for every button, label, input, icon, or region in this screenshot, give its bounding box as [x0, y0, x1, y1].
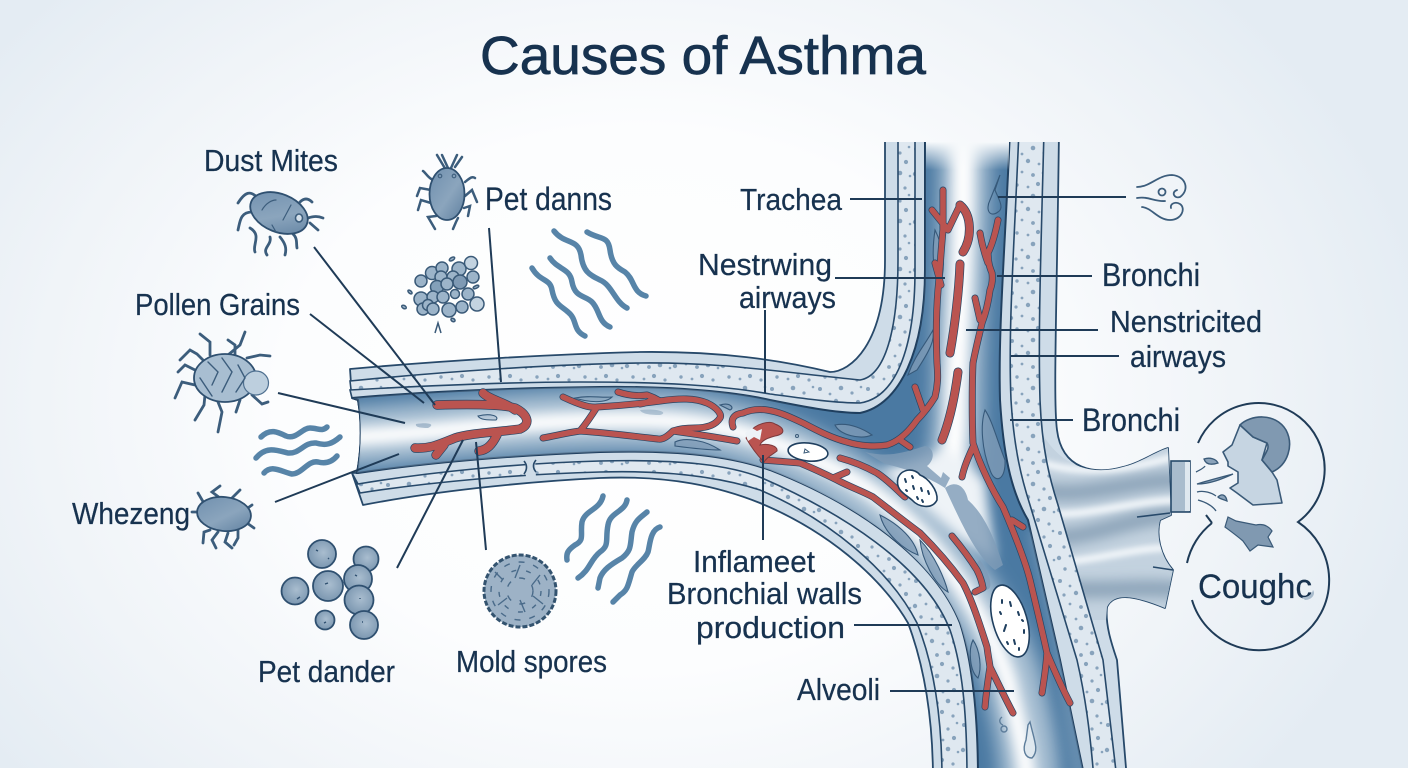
icon: pet dander spheres [282, 540, 378, 639]
hair [1240, 417, 1290, 472]
callout outline [1187, 403, 1329, 650]
head profile [1223, 425, 1282, 505]
label: Inflamed bronchial walls [667, 544, 862, 645]
icon: wavy air flow left [256, 427, 340, 474]
break in lower wall band [524, 458, 536, 478]
label: Nestrwing airways [698, 247, 836, 315]
airway outer wall with side branch [350, 130, 1173, 768]
icon: wavy lines lower [567, 496, 660, 602]
top fade of trachea [926, 142, 1009, 170]
label: Bronchi lower: Bronchi [1082, 402, 1180, 438]
bronchial blood vessels [415, 190, 1070, 713]
icon: mite near Whezeng [192, 486, 254, 548]
label: Nestrwing airways: airways [739, 280, 836, 315]
cough spray [1196, 458, 1233, 511]
label: Pollen Grains: Pollen Grains [135, 287, 300, 322]
label: Pet danns: Pet danns [485, 181, 612, 217]
cough callout [1187, 403, 1329, 650]
speckle texture [350, 130, 1117, 768]
label: Inflamed bronchial walls: Bronchial walls [667, 576, 862, 611]
label: Trachea: Trachea [740, 182, 843, 217]
icon: mite near Pet danns [417, 155, 477, 229]
icon: dust mite [238, 184, 323, 255]
c smudge [1302, 590, 1314, 600]
label: Nenstricited airways: airways [1130, 339, 1226, 374]
icon: pollen mite [175, 332, 270, 432]
label: Inflamed bronchial walls: Inflameet [693, 544, 815, 579]
lung fragment [1225, 517, 1273, 551]
title: Causes of Asthma [480, 26, 927, 86]
leader lines [275, 197, 1126, 691]
lumen shading [340, 120, 1082, 768]
label: Nenstricited airways: Nenstricited [1110, 304, 1262, 339]
cough label: Coughc [1198, 568, 1312, 606]
side branch shading [1044, 437, 1173, 620]
label: Bronchi upper: Bronchi [1102, 257, 1200, 293]
white mucus plug: large [990, 584, 1030, 658]
alveoli droplets [1000, 717, 1036, 758]
label: Nestrwing airways: Nestrwing [698, 247, 832, 282]
mucus patches [416, 175, 1005, 678]
airway lumen [352, 130, 1085, 768]
label: Nenstricited airways [1110, 304, 1262, 374]
label: Pet dander: Pet dander [258, 654, 395, 689]
icon: breath wisp [1137, 175, 1186, 220]
inflamed wall lesion [746, 422, 783, 462]
icon: wavy lines upper [532, 231, 646, 336]
branch nozzle and lips [1137, 461, 1190, 570]
icon: mold spore ball [484, 555, 556, 627]
inner pale wall layer [350, 130, 1094, 768]
airway anatomy [340, 120, 1180, 768]
label: Mold spores: Mold spores [456, 644, 607, 679]
white mucus plug: oval [787, 434, 829, 463]
icon: pollen cluster [401, 256, 484, 333]
label: Alveoli: Alveoli [797, 672, 880, 707]
speckled wall layer [350, 130, 1117, 768]
label: Whezeng: Whezeng [72, 496, 190, 531]
white mucus plug: lobed [897, 470, 937, 506]
label: Dust Mites: Dust Mites [204, 143, 338, 178]
label: Inflamed bronchial walls: production [696, 610, 845, 645]
inflamed white spot [745, 428, 762, 441]
